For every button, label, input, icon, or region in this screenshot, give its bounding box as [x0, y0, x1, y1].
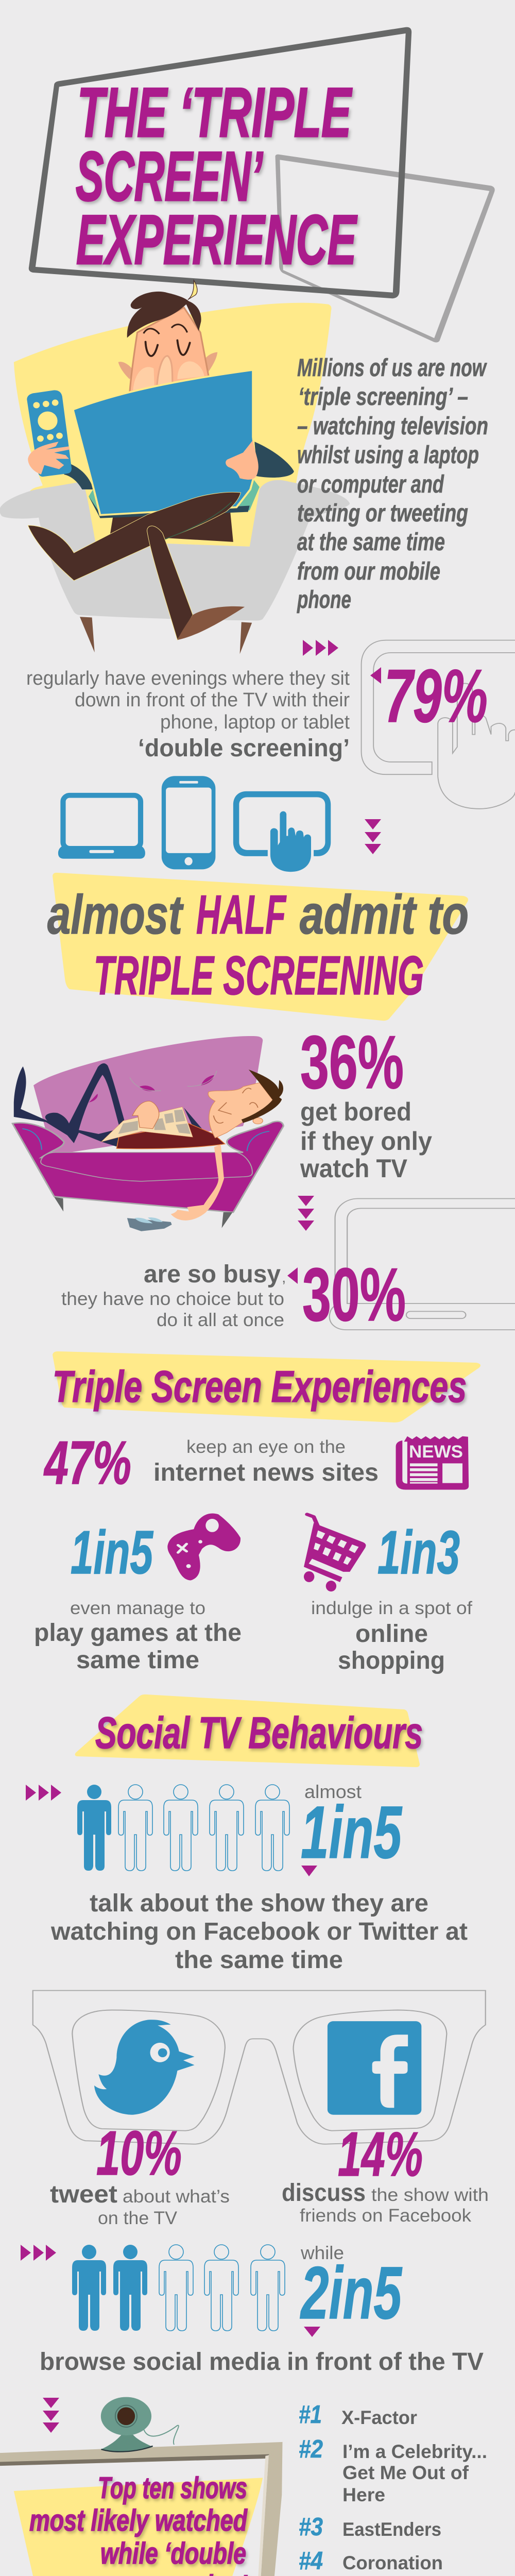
stat: 14% discuss: the show with [371, 2185, 489, 2205]
talk about text: talk about the show they are [90, 1890, 428, 1917]
icon: right arrows [21, 2245, 56, 2261]
left arrow [287, 1267, 298, 1284]
head [118, 280, 217, 392]
stat: 47% news: 47% [44, 1429, 131, 1497]
sofa body [12, 1122, 283, 1212]
reading hand [132, 1101, 159, 1129]
yellow banner [53, 1351, 480, 1422]
section: triple screen experiences [53, 1351, 480, 1422]
stat: 47% news: internet news sites [153, 1459, 379, 1486]
list item 4: Coronation [342, 2552, 443, 2573]
icon: laptop [58, 795, 145, 859]
stat: 14% discuss: 14% [338, 2119, 423, 2189]
double screening text: ‘double screening’ [138, 735, 350, 762]
stat: 1 in 3 shopping: indulge in a spot of [311, 1598, 472, 1618]
banner: almost half [47, 873, 469, 1021]
list item 2: #2 [299, 2435, 323, 2463]
list item 1: X-Factor [341, 2407, 417, 2428]
stat: 36% [300, 1020, 432, 1183]
stat: 1 in 5 games: play games at the [34, 1619, 242, 1647]
double screening text [26, 668, 350, 762]
title: SCREEN’ [76, 137, 263, 215]
stat: while 2 in 5: while [300, 2242, 344, 2263]
intro paragraph [297, 354, 488, 614]
stat: almost 1 in 5 [301, 1781, 402, 1876]
top ten heading [29, 2471, 248, 2576]
browse social media text: browse social media in front of the TV [40, 2348, 484, 2376]
stat: 1 in 3 shopping [311, 1518, 472, 1674]
double screening text: phone, laptop or tablet [160, 711, 350, 733]
icon: down arrows [43, 2398, 59, 2433]
stat: while 2 in 5: 2in5 [300, 2251, 402, 2334]
top ten list [299, 2401, 495, 2576]
stat: 1 in 3 shopping: shopping [338, 1647, 445, 1674]
list item 2: I’m a Celebrity... [342, 2441, 487, 2462]
monitor frame [0, 2442, 283, 2576]
remote control [27, 390, 72, 477]
banner heading: HALF [196, 884, 287, 945]
banner heading [47, 884, 469, 1006]
stat: while 2 in 5 [300, 2242, 402, 2337]
illustration: man on sofa [12, 1036, 283, 1231]
talk about text [50, 1890, 468, 1974]
yellow banner [53, 873, 468, 1021]
icon: newspaper: NEWS [409, 1442, 463, 1462]
icon: right arrows [26, 1785, 61, 1801]
talk about text: watching on Facebook or Twitter at [50, 1918, 468, 1945]
yellow highlight [14, 2478, 263, 2576]
stat: 47% news [44, 1429, 379, 1497]
list item 2 [299, 2435, 487, 2505]
top ten heading: while ‘double [100, 2537, 246, 2570]
stat: 10% tweet [50, 2118, 230, 2228]
stat: 1 in 3 shopping: 1in3 [377, 1518, 460, 1587]
list item 1: #1 [299, 2401, 322, 2429]
double screening text: down in front of the TV with their [75, 689, 350, 711]
stat: almost 1 in 5: 1in5 [301, 1791, 402, 1874]
banner heading: admit to [300, 884, 469, 945]
icon: facebook [328, 2021, 421, 2115]
stat: 10% tweet: about what’s [123, 2187, 230, 2207]
stat: 30%: 30% [302, 1252, 406, 1336]
icon: down arrows [298, 1196, 314, 1231]
shirt [116, 1124, 225, 1149]
stat: 10% tweet: 10% [96, 2118, 182, 2188]
yellow banner [75, 1694, 420, 1767]
top ten heading: Top ten shows [98, 2471, 247, 2505]
remote on floor [127, 1217, 172, 1231]
stat: 1 in 5 games [34, 1518, 242, 1674]
stat: 30%: they have no choice but to [61, 1288, 284, 1309]
down arrow [304, 2327, 320, 2337]
icon: tablet with hand [233, 791, 331, 872]
icon: game controller [167, 1514, 241, 1581]
head and neck [208, 1070, 283, 1138]
icon: phone [162, 776, 215, 869]
title: EXPERIENCE [76, 200, 358, 279]
dark sleeves [64, 442, 294, 489]
title [76, 73, 358, 279]
icon: newspaper [396, 1436, 469, 1490]
stat: 1 in 5 games: 1in5 [71, 1518, 153, 1587]
intro paragraph: at the same time [297, 529, 445, 556]
section: social tv behaviours [75, 1694, 423, 1767]
list item 1 [299, 2401, 417, 2429]
crossed legs [28, 492, 245, 640]
list item 2: Get Me Out of [342, 2462, 469, 2483]
stat: 14% discuss: discuss [282, 2179, 366, 2207]
icon: down arrows [365, 819, 381, 854]
down arrow [301, 1866, 317, 1876]
stat: 36%: 36% [300, 1020, 404, 1104]
illustration: monitor-headed man [0, 2397, 283, 2576]
stat: 1 in 5 games: even manage to [70, 1598, 205, 1618]
stat: 10% tweet: tweet [50, 2181, 117, 2208]
people row: 1 in 5 [77, 1785, 289, 1871]
title screens outline [29, 27, 495, 343]
stat: 1 in 3 shopping: online [355, 1620, 428, 1648]
stat: 30%: are so busy [144, 1261, 281, 1288]
banner heading: almost [47, 884, 184, 945]
reclining legs [14, 1063, 124, 1147]
stat: 30% [61, 1252, 406, 1336]
stat: 36%: get bored [300, 1097, 411, 1126]
stat: 36%: if they only [300, 1127, 432, 1156]
newspaper [101, 1107, 193, 1142]
stat: 30%: do it all at once [157, 1309, 284, 1330]
stat: 30%: , [282, 1269, 286, 1286]
far arm [184, 1108, 202, 1129]
glasses frame [33, 1991, 486, 2144]
intro paragraph: ‘triple screening’ – [298, 383, 468, 411]
illustration: man in armchair with tablet [0, 280, 350, 654]
intro paragraph: phone [297, 586, 351, 614]
list item 3 [299, 2513, 441, 2541]
device icons [58, 776, 331, 872]
yellow blob [14, 303, 332, 547]
hanging arm [171, 1144, 224, 1221]
stat: 1 in 5 games: same time [76, 1647, 199, 1674]
list item 4 [299, 2547, 443, 2576]
left arrow [370, 667, 381, 684]
list item 2: Here [342, 2484, 385, 2505]
tablet and hand outline [362, 640, 515, 809]
main screen [29, 27, 411, 298]
double screening text: regularly have evenings where they sit [26, 668, 350, 689]
list item 3: EastEnders [342, 2519, 441, 2540]
icon: right arrows [303, 640, 338, 656]
second screen [275, 155, 495, 343]
stat: 36%: watch TV [300, 1154, 408, 1183]
stat: 14% discuss [282, 2119, 489, 2226]
tablet outline [330, 1199, 515, 1330]
tablet [73, 370, 260, 518]
intro paragraph: from our mobile [297, 558, 440, 585]
sofa legs [54, 1197, 233, 1228]
icon: shopping cart [304, 1514, 366, 1591]
sofa cushions marks [89, 1071, 217, 1103]
armchair [0, 480, 350, 621]
icon: twitter bird [94, 2020, 195, 2115]
webcam [101, 2397, 179, 2452]
people row: 2 in 5 [72, 2245, 285, 2331]
sofa cushion [41, 1153, 252, 1181]
intro paragraph: texting or tweeting [297, 500, 468, 527]
talk about text: the same time [175, 1946, 343, 1974]
glasses with social icons [33, 1991, 486, 2144]
stat: 14% discuss: friends on Facebook [300, 2206, 472, 2226]
sofa arm accents [22, 1129, 269, 1151]
right hand [226, 440, 259, 480]
intro paragraph: or computer and [297, 471, 444, 498]
armchair legs [80, 617, 252, 654]
stat: 47% news: keep an eye on the [186, 1437, 346, 1457]
stat: 10% tweet: on the TV [98, 2208, 178, 2228]
sofa back [33, 1036, 263, 1155]
list item 3: #3 [299, 2513, 323, 2541]
list item 4: #4 [299, 2547, 323, 2575]
stat: almost 1 in 5: almost [304, 1781, 362, 1802]
title: THE ‘TRIPLE [77, 73, 353, 151]
top ten heading: most likely watched [29, 2504, 248, 2537]
